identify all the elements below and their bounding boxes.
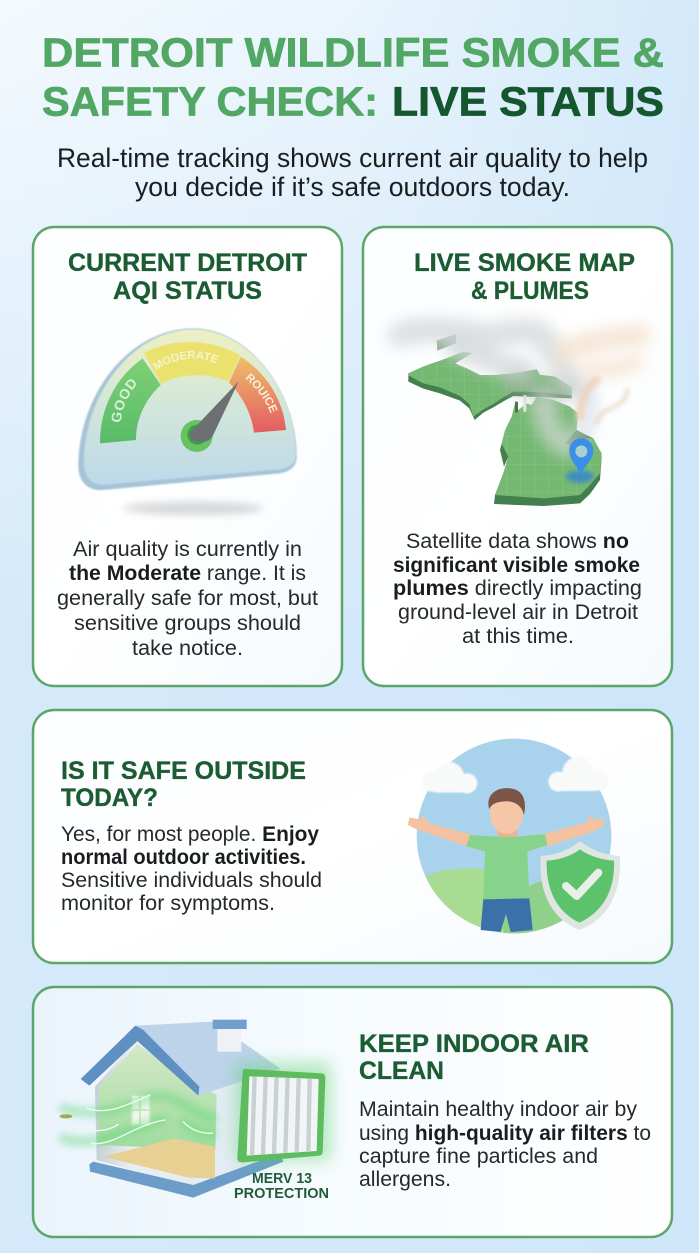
text: AQI description: take notice.	[132, 636, 243, 660]
gauge segment: good: GOOD	[112, 379, 136, 422]
text: indoor air guidance: using high-quality air filters to	[359, 1121, 651, 1145]
text: safety guidance	[61, 822, 322, 915]
text: AQI description: sensitive groups should	[74, 611, 301, 635]
icon: MERV 13 air filter	[235, 1062, 332, 1162]
text: smoke map description: plumes directly impacting	[393, 576, 642, 600]
heading: keep indoor air clean: CLEAN	[359, 1057, 444, 1085]
heading: live smoke map: & PLUMES	[471, 277, 589, 305]
person	[408, 788, 604, 932]
text: AQI description: Air quality is currently in	[73, 537, 302, 561]
map: Michigan landmass	[408, 334, 602, 506]
icon: clouds	[422, 757, 608, 793]
icon: AQI gauge	[78, 328, 298, 518]
panel: current Detroit AQI status	[32, 226, 344, 688]
illustration: house with air filter	[60, 1020, 332, 1198]
label: MERV 13 protection	[234, 1171, 329, 1202]
text: indoor air guidance: allergens.	[359, 1167, 451, 1191]
subtitle: you decide if it’s safe outdoors today.	[135, 172, 570, 202]
subtitle: Real-time tracking shows current air quality to help	[57, 143, 648, 173]
panel: keep indoor air clean	[33, 987, 672, 1237]
house	[81, 1020, 283, 1198]
smoke plume: orange	[563, 335, 640, 372]
text: safety guidance: Sensitive individuals should	[61, 868, 322, 892]
map: Michigan with smoke plumes	[400, 330, 640, 506]
gauge segment: rough	[229, 356, 286, 433]
icon: shield with check	[540, 841, 620, 930]
panel: live smoke map and plumes	[363, 227, 672, 686]
gauge segment: moderate: MODERATE	[152, 351, 219, 370]
text: smoke map description: Satellite data shows no	[406, 529, 629, 553]
label: MERV 13 protection: PROTECTION	[234, 1186, 329, 1202]
title: SAFETY CHECK:	[42, 78, 378, 124]
heading: current AQI status	[68, 249, 307, 305]
text: indoor air guidance: Maintain healthy indoor air by	[359, 1097, 637, 1121]
heading: live smoke map	[414, 249, 635, 305]
text: AQI description	[57, 537, 318, 660]
gauge segment: moderate	[144, 342, 240, 384]
title	[42, 30, 664, 124]
text: indoor air guidance: capture fine particles and	[359, 1144, 598, 1168]
title: DETROIT WILDLIFE SMOKE &	[42, 30, 664, 76]
airflow lines	[60, 1095, 213, 1144]
label: MERV 13 protection: MERV 13	[252, 1171, 312, 1187]
heading: is it safe outside: IS IT SAFE OUTSIDE	[61, 757, 306, 785]
smoke plume: grey	[400, 330, 589, 445]
heading: current AQI status: CURRENT DETROIT	[68, 249, 307, 277]
heading: keep indoor air clean: KEEP INDOOR AIR	[359, 1030, 589, 1058]
heading: keep indoor air clean	[359, 1030, 589, 1085]
panel: is it safe outside today	[33, 710, 672, 975]
heading: is it safe outside	[61, 757, 306, 812]
heading: current AQI status: AQI STATUS	[113, 277, 262, 305]
illustration: person outdoors with shield	[408, 738, 620, 934]
gauge needle	[181, 381, 239, 452]
text: indoor air guidance	[359, 1097, 651, 1191]
gauge segment: good	[100, 358, 160, 444]
smoke wisps	[580, 380, 627, 423]
text: safety guidance: Yes, for most people. Enjoy	[61, 822, 319, 846]
text: safety guidance: normal outdoor activities.	[61, 845, 306, 869]
text: AQI description: the Moderate range. It is	[69, 561, 306, 585]
sky circle with hills	[416, 738, 612, 934]
heading: is it safe outside: TODAY?	[61, 784, 158, 812]
heading: live smoke map: LIVE SMOKE MAP	[414, 249, 635, 277]
text: smoke map description: ground-level air in Detroit	[398, 600, 638, 624]
subtitle	[57, 143, 648, 202]
text: AQI description: generally safe for most, but	[57, 586, 318, 610]
text: smoke map description: significant visible smoke	[393, 553, 640, 577]
text: smoke map description	[393, 529, 642, 648]
text: safety guidance: monitor for symptoms.	[61, 891, 275, 915]
title: LIVE STATUS	[392, 78, 664, 124]
gauge segment: rough: ROUICE	[246, 373, 278, 414]
text: smoke map description: at this time.	[462, 624, 574, 648]
icon: location pin	[566, 438, 594, 483]
